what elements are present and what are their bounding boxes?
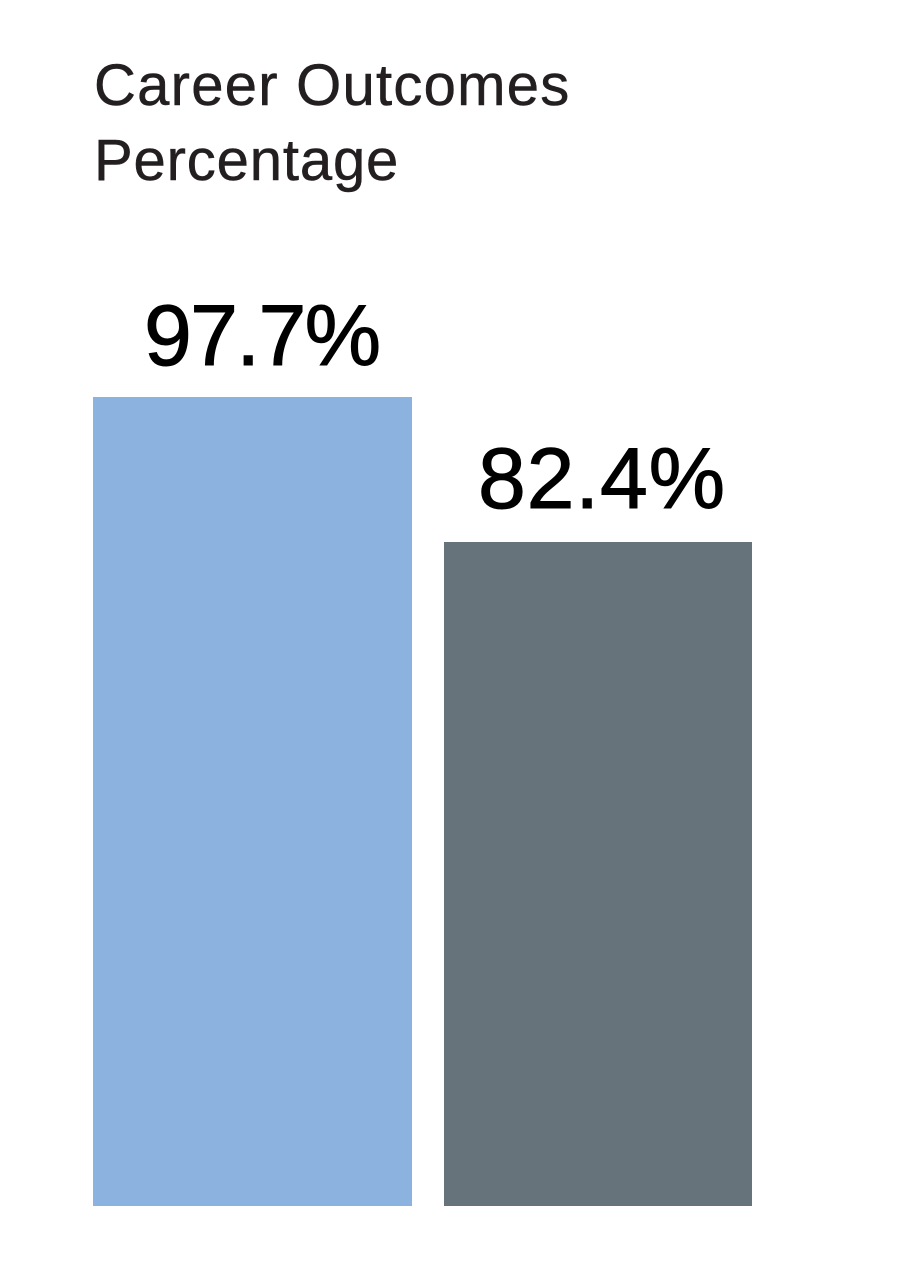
title: Percentage: [94, 128, 399, 193]
title: [94, 53, 570, 193]
value label: 97.7%: 97.7%: [144, 288, 379, 384]
value label: 82.4%: 82.4%: [478, 431, 726, 527]
bar: blue 97.7%: [93, 397, 412, 1206]
title: Career Outcomes: [94, 53, 570, 118]
chart: career outcomes bars: [93, 288, 752, 1206]
bar: grey 82.4%: [444, 542, 752, 1206]
